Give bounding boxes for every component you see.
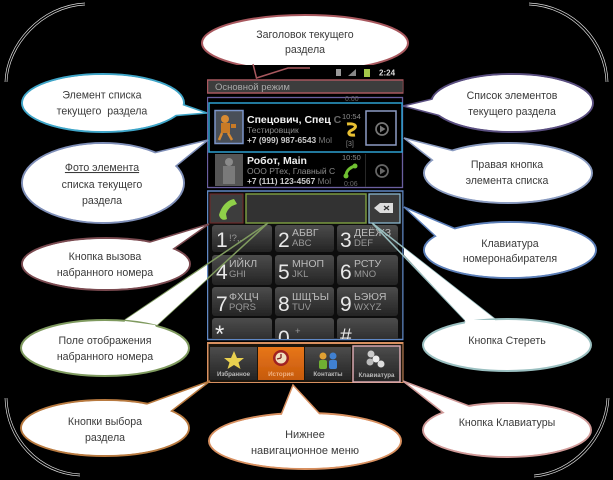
photo 1: [215, 110, 243, 144]
callout: section header: раздела: [285, 44, 325, 56]
keys: WXYZ: [354, 302, 382, 313]
list item 1: Спецович, Спец С: [247, 114, 342, 126]
keys: 4: [216, 261, 228, 284]
callout: bottom navigation: Нижнее: [285, 429, 325, 441]
callout: element list: [403, 74, 593, 132]
keys: ABC: [292, 238, 312, 249]
callout: section buttons: Кнопки выбора: [68, 416, 142, 428]
callout: erase button: Кнопка Стереть: [468, 335, 546, 347]
keys: 1: [216, 229, 228, 252]
number field: [246, 194, 366, 223]
dial keypad: [208, 191, 403, 350]
keys: АБВГ: [292, 227, 319, 239]
callout: call button: набранного номера: [57, 267, 153, 279]
callout: call button: Кнопка вызова: [69, 251, 141, 263]
callout: erase button: [372, 223, 591, 371]
callout: element list: текущего раздела: [468, 106, 556, 118]
callout: item photo: списка текущего: [62, 179, 142, 191]
keys: +: [295, 326, 301, 337]
tab: favorites: [210, 347, 257, 380]
callout: keypad button: Кнопка Клавиатуры: [459, 417, 555, 429]
list item 1: [3]: [346, 141, 354, 148]
header: current section: [208, 80, 404, 93]
phone screenshot: [207, 65, 404, 383]
callout: section buttons: раздела: [85, 432, 125, 444]
keys: 8: [278, 293, 290, 316]
keys: РСТУ: [354, 258, 382, 270]
list item 1: 10:54: [342, 112, 361, 121]
keys: ДЕЁЖЗ: [354, 227, 391, 239]
callout: dial keypad: Клавиатура: [481, 238, 539, 250]
keys: 3: [340, 229, 352, 252]
callout: call button: [22, 224, 209, 290]
keys: 0: [278, 327, 290, 350]
keys: [212, 225, 398, 350]
list item 2: [215, 153, 388, 188]
callout: item photo: [22, 140, 208, 223]
list item 1: [215, 96, 396, 148]
callout: element list: Список элементов: [467, 90, 558, 102]
keys: ФХЦЧ: [229, 291, 259, 303]
callout: section header: [202, 15, 408, 78]
keys: PQRS: [229, 302, 256, 313]
callout: number field: набранного номера: [57, 351, 153, 363]
tab: contacts: Контакты: [313, 371, 343, 378]
callout: right button: [404, 138, 592, 203]
keys: 5: [278, 261, 290, 284]
callout: item photo: раздела: [82, 195, 122, 207]
current item frame: [209, 103, 402, 152]
keys: 7: [216, 293, 228, 316]
keys: *: [215, 321, 224, 348]
list item 1: Тестировщик: [247, 125, 299, 135]
callout: dial keypad: [404, 207, 596, 278]
keys: MNO: [354, 269, 376, 280]
keys: TUV: [292, 302, 312, 313]
call button: [210, 194, 243, 223]
callout: right button: элемента списка: [466, 175, 549, 187]
keys: JKL: [292, 269, 308, 280]
callout: item photo: Фото элемента: [65, 162, 139, 174]
callout: section header: Заголовок текущего: [256, 29, 354, 41]
keys: 2: [278, 229, 290, 252]
callout: bottom navigation: [209, 385, 401, 469]
keys: 9: [340, 293, 352, 316]
status bar: 2:24: [379, 68, 396, 78]
tab: keypad: [353, 346, 400, 382]
list item 2: 0:06: [344, 181, 358, 188]
list item 1: 0:00: [345, 96, 359, 103]
keys: ЬЭЮЯ: [354, 291, 387, 303]
keys: #: [340, 325, 352, 348]
keys: 6: [340, 261, 352, 284]
call icon yellow: [347, 124, 355, 135]
callout: list item: Элемент списка: [62, 90, 142, 102]
keys: ИЙКЛ: [229, 257, 257, 270]
callout: number field: Поле отображения: [59, 335, 151, 347]
list item 2: ООО РТех, Главный С: [247, 166, 335, 176]
callout: bottom navigation: навигационное меню: [251, 445, 359, 457]
list item 2: 10:50: [342, 153, 361, 162]
callout: list item: текущего раздела: [57, 106, 147, 118]
tab: history: [258, 347, 304, 380]
tab: history: История: [268, 371, 294, 378]
status bar: [207, 65, 403, 79]
callout: keypad button: [403, 381, 591, 457]
header: current section: Основной режим: [215, 82, 290, 93]
erase button: [369, 194, 400, 223]
list item 1: +7 (999) 987-6543 Mol: [247, 135, 332, 145]
right button 1: [366, 111, 396, 145]
tab: favorites: Избранное: [217, 371, 251, 378]
callout: number field: [21, 223, 268, 376]
keys: МНОП: [292, 258, 324, 270]
keys: ШЩЪЫ: [292, 291, 329, 303]
bottom navigation menu: [208, 343, 404, 383]
list of elements: [208, 96, 402, 188]
callout: list item: [22, 74, 207, 132]
list item 2: +7 (111) 123-4567 Mol: [247, 176, 331, 186]
list item 2: Робот, Main: [247, 155, 307, 167]
tab: keypad: Клавиатура: [359, 372, 395, 379]
keys: DEF: [354, 238, 373, 249]
callout: dial keypad: номеронабирателя: [463, 253, 557, 265]
tab: contacts: [305, 347, 351, 380]
callout: section buttons: [21, 381, 210, 456]
keys: GHI: [229, 269, 246, 280]
callout: right button: Правая кнопка: [471, 159, 543, 171]
keys: !?,.: [229, 233, 242, 244]
